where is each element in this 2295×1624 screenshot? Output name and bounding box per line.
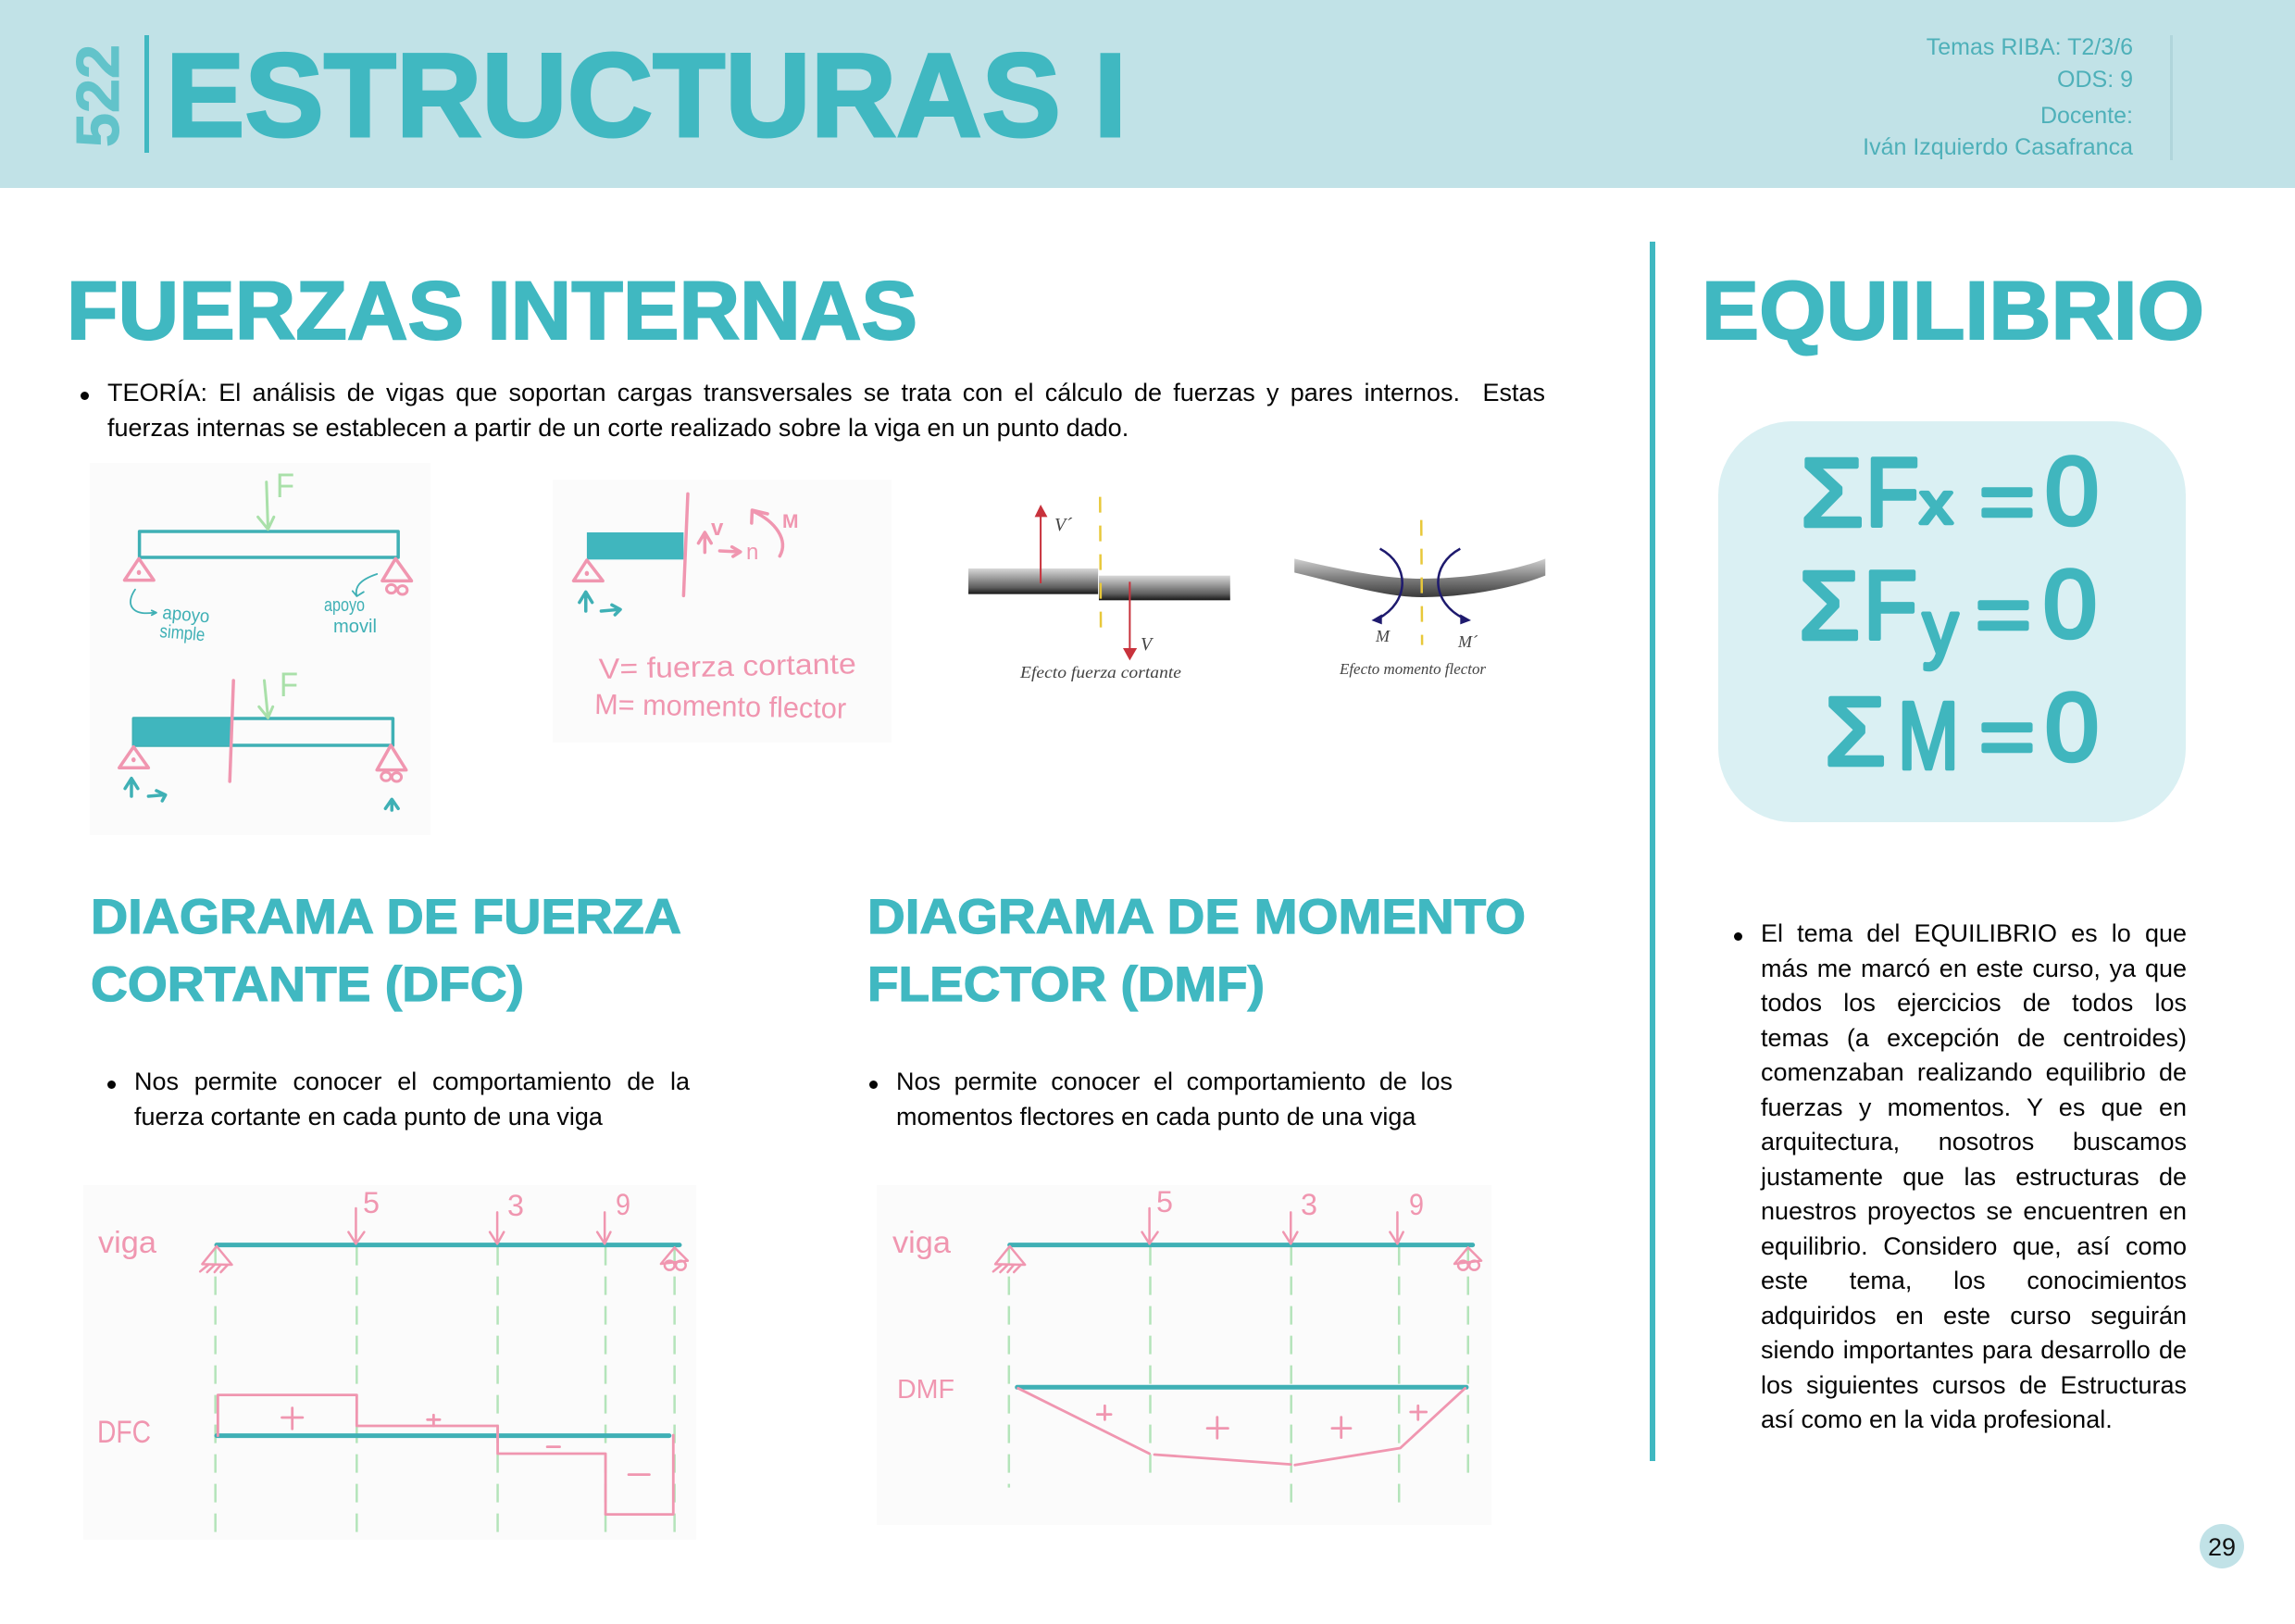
equation: sum Fx — [1801, 438, 2099, 547]
text: teoria — [81, 379, 1545, 441]
heading: dmf: DIAGRAMA DE MOMENTO — [867, 890, 1526, 944]
title: ESTRUCTURAS I — [166, 30, 1127, 162]
chart: bending moment diagram — [877, 1185, 1491, 1525]
panel: beam diagrams: F — [280, 666, 298, 704]
panel: cut section — [553, 480, 892, 743]
equation: sum Fy: F — [1864, 552, 1917, 660]
equation: sum M: M — [1898, 682, 1959, 789]
beam two — [133, 718, 393, 745]
cut legend: V= fuerza cortante — [598, 647, 856, 685]
heading: fuerzas internas: FUERZAS INTERNAS — [67, 264, 917, 356]
diagram: bending effect: M — [1375, 627, 1391, 645]
header info: Docente: — [2040, 103, 2133, 129]
heading: dfc: CORTANTE (DFC) — [91, 957, 524, 1012]
chart: bending moment diagram: 3 — [1301, 1188, 1317, 1221]
equation: sum Fy: y — [1923, 586, 1958, 670]
text: dmf bullet — [869, 1068, 1453, 1130]
header info: Iván Izquierdo Casafranca — [1863, 134, 2133, 160]
text: equilibrio reflection: este tema, los conocimientos — [1761, 1267, 2187, 1294]
chart: bending moment diagram: DMF — [897, 1375, 954, 1405]
text: equilibrio reflection: así como en la vida profesional. — [1761, 1405, 2113, 1433]
equation: sum Fx: F — [1865, 439, 1919, 547]
diagram: shear effect: V — [1141, 634, 1154, 655]
text: equilibrio reflection: adquiridos en este curso seguirán — [1761, 1302, 2187, 1330]
equation: sum M: Σ — [1825, 678, 1886, 786]
equation: sum Fx: 0 — [2045, 438, 2099, 545]
text: equilibrio reflection: los siguientes cursos de Estructuras — [1761, 1370, 2187, 1398]
header info: ODS: 9 — [2057, 67, 2133, 93]
course number 522: 522 — [64, 44, 131, 147]
text: equilibrio reflection — [1734, 919, 2187, 1433]
heading: dfc: DIAGRAMA DE FUERZA — [91, 890, 681, 944]
panel: beam diagrams: apoyo — [162, 603, 210, 627]
hand labels: F — [276, 467, 294, 505]
equation: sum Fy — [1799, 551, 2097, 670]
page number: 29 — [2208, 1533, 2236, 1561]
text: equilibrio reflection: equilibrio. Considero que, así como — [1761, 1231, 2187, 1259]
chart: bending moment diagram: 5 — [1156, 1185, 1173, 1218]
heading: dfc — [91, 890, 681, 1012]
header band — [0, 0, 2295, 188]
chart: shear force diagram: viga — [98, 1225, 157, 1259]
text: dmf bullet: momentos flectores en cada punto de una viga — [896, 1102, 1416, 1130]
panel: equilibrium equations — [1718, 421, 2186, 822]
panel: cut section: M — [782, 511, 798, 532]
diagram: shear effect — [968, 497, 1230, 681]
text: equilibrio reflection: justamente que las estructuras de — [1761, 1163, 2187, 1191]
chart: shear force diagram: 5 — [363, 1186, 380, 1219]
chart: shear force diagram: 3 — [507, 1189, 524, 1222]
diagram: bending effect — [1294, 520, 1545, 678]
diagram: shear effect: Efecto fuerza cortante — [1019, 663, 1181, 681]
diagram: bending effect: M´ — [1457, 632, 1478, 651]
panel: beam diagrams — [90, 463, 430, 835]
chart: shear force diagram: 9 — [616, 1188, 630, 1221]
panel: beam diagrams: apoyo — [324, 595, 365, 616]
equation: sum M: 0 — [2045, 674, 2099, 781]
panel: cut section: n — [746, 540, 758, 565]
text: equilibrio reflection: todos los ejercicios de todos los — [1761, 989, 2187, 1017]
panel: cut section: M= momento flector — [594, 688, 846, 725]
text: dfc bullet — [107, 1068, 690, 1130]
page number — [2200, 1524, 2244, 1568]
text: equilibrio reflection: fuerzas y momentos. Y es que en — [1761, 1093, 2187, 1120]
text: equilibrio reflection: El tema del EQUILIBRIO es lo que — [1761, 919, 2187, 947]
header divider — [144, 35, 149, 153]
text: equilibrio reflection: más me marcó en este curso, ya que — [1761, 954, 2187, 981]
text: equilibrio reflection: temas (a excepción de centroides) — [1761, 1024, 2187, 1052]
equation: sum Fx: Σ — [1801, 439, 1864, 547]
panel: beam diagrams: simple — [159, 621, 206, 645]
panel: beam diagrams: movil — [333, 617, 377, 637]
equation: sum Fx: x — [1920, 472, 1952, 536]
chart: bending moment diagram: 9 — [1409, 1188, 1424, 1221]
beam one — [140, 531, 398, 557]
text: dfc bullet: fuerza cortante en cada punto de una viga — [134, 1102, 603, 1130]
heading: dmf: FLECTOR (DMF) — [867, 957, 1265, 1012]
text: equilibrio reflection: siendo importantes para desarrollo de — [1761, 1336, 2187, 1364]
header info: Temas RIBA: T2/3/6 — [1927, 34, 2133, 60]
text: equilibrio reflection: comenzaban realizando equilibrio de — [1761, 1058, 2187, 1086]
text: teoria: TEORÍA: El análisis de vigas que soportan cargas transversales se trata con el cálculo de fuerzas y pares internos. Estas — [107, 379, 1545, 406]
equation: sum Fy: = — [1976, 568, 2031, 660]
equation: sum Fx: = — [1979, 456, 2035, 547]
text: dmf bullet: Nos permite conocer el comportamiento de los — [896, 1068, 1453, 1095]
equation: sum Fy: 0 — [2043, 551, 2097, 658]
equation: sum M: = — [1979, 691, 2035, 782]
chart: bending moment diagram: viga — [892, 1225, 952, 1259]
heading: dmf — [867, 890, 1526, 1012]
diagram: shear effect: V´ — [1054, 515, 1072, 535]
chart: shear force diagram: DFC — [97, 1415, 151, 1450]
equation: sum Fy: Σ — [1799, 552, 1860, 660]
header info — [1863, 34, 2133, 160]
chart: shear force diagram — [83, 1185, 696, 1540]
panel: cut section: v — [711, 516, 724, 541]
column divider — [1650, 242, 1655, 1461]
text: equilibrio reflection: nuestros proyectos se encuentren en — [1761, 1197, 2187, 1225]
heading: equilibrio: EQUILIBRIO — [1702, 264, 2204, 356]
text: teoria: fuerzas internas se establecen a partir de un corte realizado sobre la viga en un punto dado. — [107, 413, 1129, 441]
diagram: bending effect: Efecto momento flector — [1339, 660, 1486, 678]
header right rule — [2170, 35, 2173, 160]
text: equilibrio reflection: arquitectura, nosotros buscamos — [1761, 1128, 2187, 1156]
equation: sum M — [1825, 674, 2099, 789]
text: dfc bullet: Nos permite conocer el comportamiento de la — [134, 1068, 690, 1095]
